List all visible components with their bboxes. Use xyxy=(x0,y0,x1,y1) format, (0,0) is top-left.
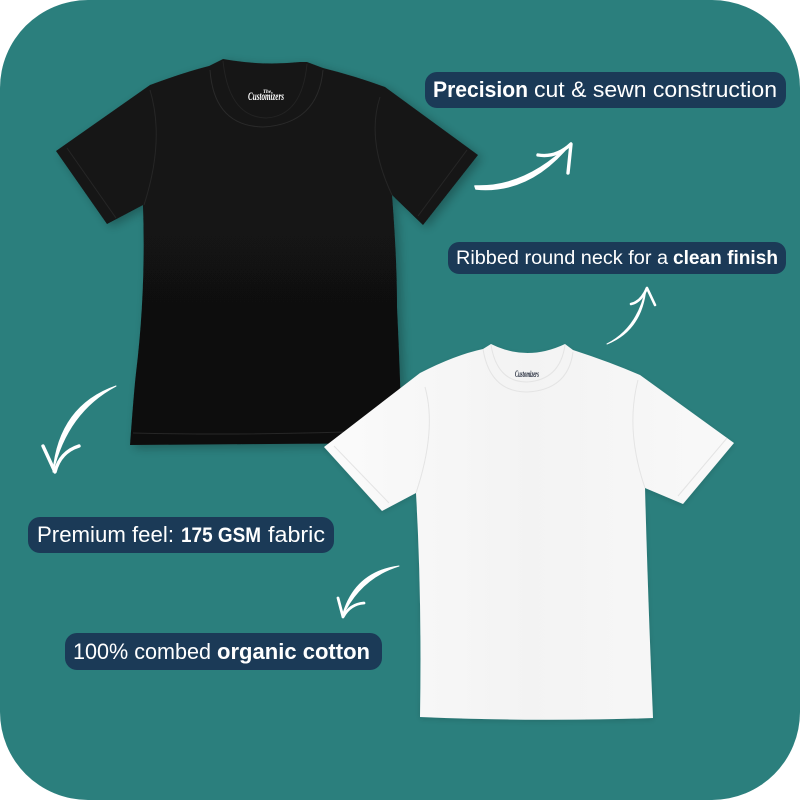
white collar xyxy=(483,345,573,392)
callout: organic cotton: 100% combed xyxy=(73,639,211,664)
callout: ribbed neck: clean finish xyxy=(673,248,778,269)
black collar xyxy=(210,61,323,127)
callout: precision: cut & sewn construction xyxy=(534,77,777,102)
black shirt neck label: Customizers xyxy=(248,89,284,103)
black shirt neck label xyxy=(248,89,284,103)
arrow: to organic cotton callout xyxy=(338,566,399,617)
callout: ribbed neck: Ribbed round neck for a xyxy=(456,248,668,269)
callout: organic cotton: organic cotton xyxy=(217,639,370,664)
callout: precision: Precision xyxy=(433,77,528,102)
callout: ribbed neck xyxy=(448,242,786,274)
callout: organic cotton xyxy=(65,633,382,670)
callout: fabric weight: Premium feel: xyxy=(37,522,174,547)
white t-shirt xyxy=(324,344,734,720)
callout: fabric weight: 175 GSM xyxy=(181,524,261,547)
arrow: to fabric weight callout xyxy=(43,386,116,472)
arrow: to ribbed neck callout xyxy=(607,288,655,344)
black shirt neck label: The xyxy=(263,90,272,95)
arrow: to precision callout xyxy=(475,143,571,189)
black shirt seams xyxy=(67,90,467,434)
callout: fabric weight: fabric xyxy=(268,522,325,547)
callout: fabric weight xyxy=(28,517,334,553)
white shirt neck label: Customizers xyxy=(515,369,539,379)
callout: precision xyxy=(425,72,786,108)
black t-shirt xyxy=(56,59,478,445)
white shirt seams xyxy=(334,380,727,503)
